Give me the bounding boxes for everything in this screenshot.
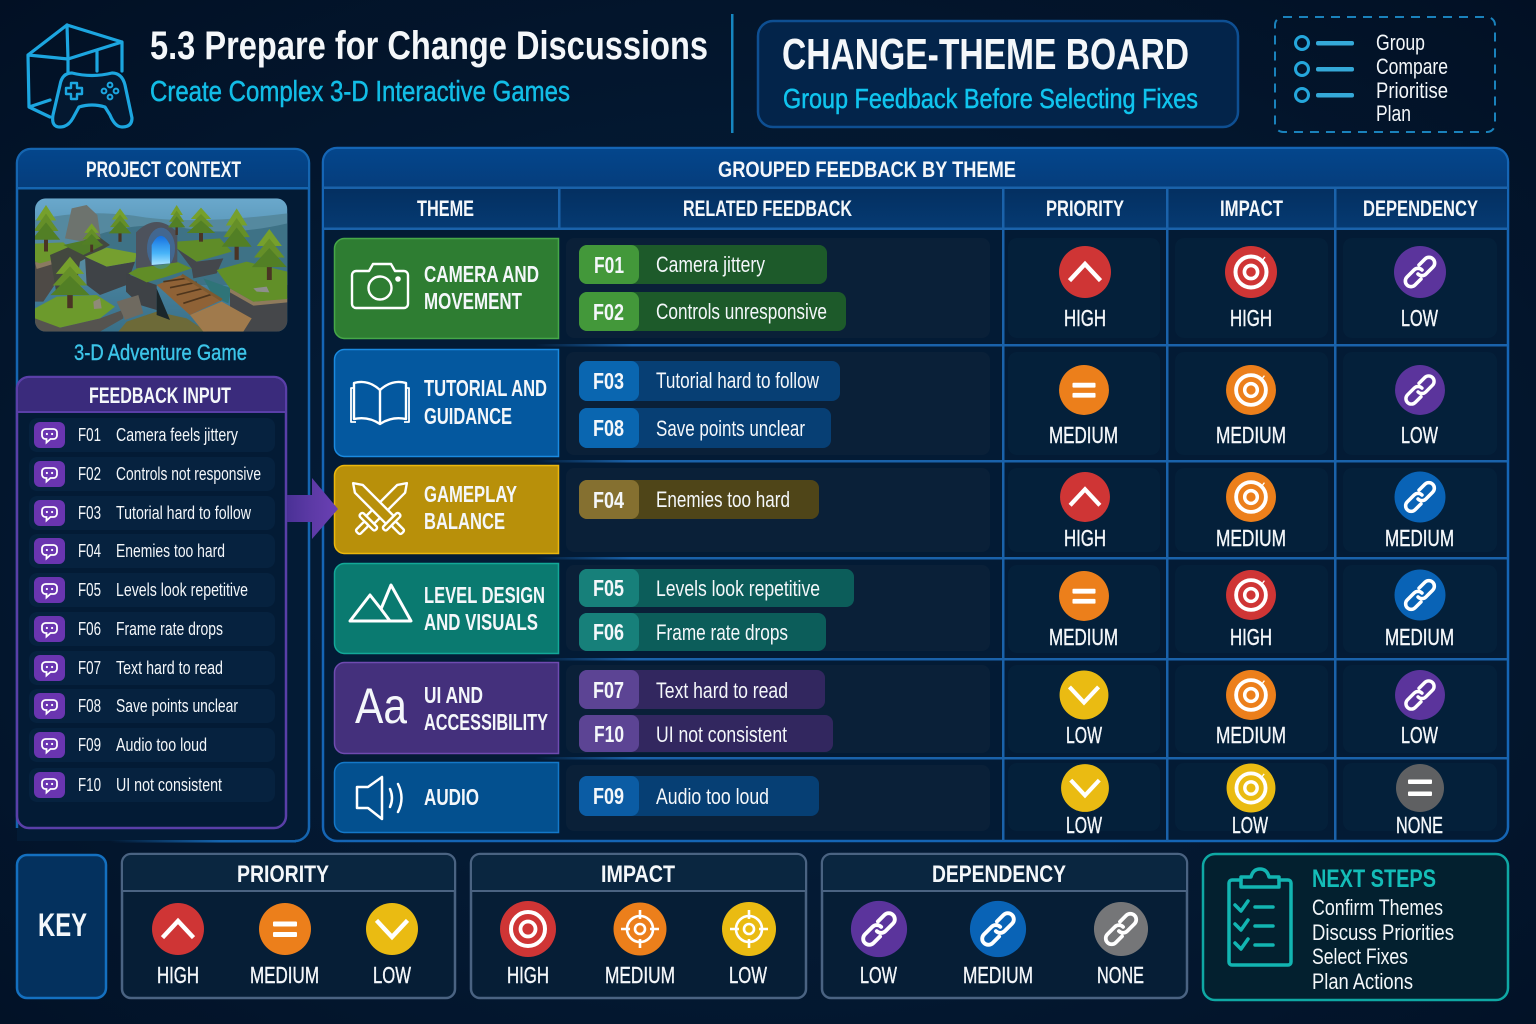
arrow: feedback input to themes [287,478,338,539]
rating: audio dependency none: NONE [1396,812,1443,838]
feedback pill F06 [579,613,826,651]
theme card: level design and visuals: AND VISUALS [424,609,538,635]
feedback pill F04 [579,480,819,519]
panel: project context [17,149,309,842]
key: impact low: LOW [729,962,767,988]
subtitle: Create Complex 3-D Interactive Games [150,76,570,108]
feedback pill F07: Text hard to read [656,678,788,703]
feedback row F09 [29,728,275,762]
feedback pill F03 [579,361,840,401]
column headings [417,196,1478,221]
rating: level design dependency medium [1385,570,1454,650]
rating: audio priority low [1061,764,1109,838]
feedback pill F08 [579,408,831,448]
heading: grouped feedback: GROUPED FEEDBACK BY THEME [718,157,1016,182]
feedback row F08: F08 [78,696,101,716]
rating: tutorial priority medium [1049,365,1118,448]
feedback row F04: F04 [78,541,101,561]
rating: audio dependency none [1396,764,1444,838]
key: dependency low: LOW [860,962,897,988]
key label [17,855,106,998]
rating: UI dependency low: LOW [1401,722,1438,748]
theme card: gameplay balance: BALANCE [424,508,505,534]
panel: change-theme board banner [758,21,1238,127]
game scene illustration [32,198,287,332]
key panel: dependency: DEPENDENCY [932,861,1066,888]
rating: level design impact high: HIGH [1230,624,1272,650]
key: dependency medium: MEDIUM [963,962,1033,988]
theme card: audio: AUDIO [424,784,479,810]
theme card: gameplay balance: GAMEPLAY [424,481,517,507]
column headings: THEME [417,196,474,221]
game label: 3-D Adventure Game [74,340,247,365]
feedback row F01: Camera feels jittery [116,425,238,445]
feedback pill F04: Enemies too hard [656,487,790,512]
feedback row F02: Controls not responsive [116,464,261,484]
icon: mountains [350,585,411,621]
key panel: dependency [822,854,1187,998]
rating: tutorial impact medium: MEDIUM [1216,422,1286,448]
rating: audio priority low: LOW [1066,812,1102,838]
feedback pill F06: Frame rate drops [656,620,788,645]
feedback pill F09: F09 [593,783,624,809]
rating: tutorial priority medium: MEDIUM [1049,422,1118,448]
theme card: tutorial and guidance [334,350,558,456]
next steps list [1312,895,1454,994]
feedback row F06: F06 [78,619,101,639]
key: impact low [722,902,776,988]
feedback pill F09: Audio too loud [656,784,769,809]
key: impact medium [605,902,675,988]
rating: UI priority low: LOW [1066,722,1102,748]
feedback pill F05 [579,569,854,607]
feedback pill F08: Save points unclear [656,416,805,441]
next steps list: Discuss Priorities [1312,920,1454,945]
feedback pill F01: F01 [594,252,624,278]
rating: camera priority high [1059,246,1111,331]
feedback row F01 [29,418,275,452]
feedback pill F04: F04 [593,487,624,513]
panel: next steps [1203,854,1508,1000]
feedback pill F10: UI not consistent [656,722,787,747]
column headings: RELATED FEEDBACK [683,196,852,221]
step list: Prioritise [1376,78,1448,103]
rating: camera priority high: HIGH [1064,305,1106,331]
key: priority medium [250,903,319,988]
rating: gameplay impact medium: MEDIUM [1216,525,1286,551]
panel: grouped feedback by theme [323,148,1508,841]
heading: feedback input: FEEDBACK INPUT [89,383,231,408]
feedback row F03: Tutorial hard to follow [116,503,252,523]
feedback pill F10: F10 [594,721,624,747]
next steps list: Confirm Themes [1312,895,1443,920]
feedback row F06 [29,612,275,646]
rating: gameplay priority high [1060,472,1110,551]
rating: camera impact high [1225,246,1277,331]
feedback row F08 [29,689,275,723]
feedback pill F01: Camera jittery [656,252,765,277]
theme card: camera and movement: MOVEMENT [424,288,522,314]
feedback row F07: F07 [78,658,101,678]
rating: gameplay impact medium [1216,472,1286,551]
rating: level design priority medium: MEDIUM [1049,624,1118,650]
rating: UI priority low [1060,671,1108,748]
rating: audio impact low: LOW [1232,812,1268,838]
rating: tutorial dependency low [1395,365,1445,448]
column headings: PRIORITY [1046,196,1124,221]
rating: camera dependency low [1394,246,1446,331]
feedback row F04: Enemies too hard [116,541,225,561]
column headings: IMPACT [1220,196,1283,221]
feedback pill F05: F05 [593,575,624,601]
key: dependency none [1094,902,1148,988]
feedback pill F06: F06 [593,619,624,645]
column headings: DEPENDENCY [1363,196,1478,221]
theme card: UI and accessibility: UI AND [424,682,483,708]
feedback row F10: UI not consistent [116,775,222,795]
theme card: UI and accessibility [334,662,558,754]
feedback row F07 [29,651,275,685]
feedback row F04 [29,534,275,568]
rating: gameplay priority high: HIGH [1064,525,1106,551]
icon: 3-D cube with game controller [28,25,132,127]
feedback row F08: Save points unclear [116,696,238,716]
banner heading: CHANGE-THEME BOARD [782,30,1189,79]
rating: gameplay dependency medium: MEDIUM [1385,525,1454,551]
panel: feedback input [17,377,286,828]
key panel: impact: IMPACT [601,861,675,888]
title: 5.3 Prepare for Change Discussions [150,24,708,68]
theme card: tutorial and guidance: GUIDANCE [424,403,512,429]
key panel: priority: PRIORITY [237,861,329,888]
icon: Aa type: Aa [355,678,407,734]
key: dependency none: NONE [1097,962,1144,988]
key: dependency medium [963,901,1033,988]
theme card: level design and visuals [334,564,558,654]
key: impact high: HIGH [507,962,549,988]
step list [1376,30,1448,126]
theme card: UI and accessibility: ACCESSIBILITY [424,709,548,735]
theme card: camera and movement: CAMERA AND [424,261,539,287]
feedback row F10: F10 [78,775,101,795]
rating: level design priority medium [1049,571,1118,650]
rating: tutorial impact medium [1216,365,1286,448]
icon: open book [351,382,409,424]
icon: camera [352,264,408,308]
theme card: camera and movement [334,238,558,338]
feedback pill F10 [579,715,833,752]
key panel: priority [122,854,455,998]
feedback row F03: F03 [78,503,101,523]
feedback row F02: F02 [78,464,101,484]
feedback pill F02 [579,292,846,331]
key: dependency low [851,901,907,988]
rating: tutorial dependency low: LOW [1401,422,1438,448]
feedback row F09: F09 [78,735,101,755]
feedback pill F05: Levels look repetitive [656,576,820,601]
step list: Compare [1376,54,1448,79]
step list: Plan [1376,101,1411,126]
key: priority low [366,903,418,988]
key: priority low: LOW [373,962,411,988]
icon: crossed swords [345,475,415,540]
feedback row F02 [29,457,275,491]
icon: clipboard checklist [1229,869,1291,965]
key panel: impact [471,854,806,998]
rating: UI impact medium [1216,670,1286,748]
rating: gameplay dependency medium [1385,472,1454,551]
feedback pill F07 [579,670,825,709]
key: priority high [152,903,204,988]
theme card: gameplay balance [334,466,558,554]
key: priority medium: MEDIUM [250,962,319,988]
heading: project context: PROJECT CONTEXT [86,157,241,182]
rating: UI impact medium: MEDIUM [1216,722,1286,748]
rating: camera impact high: HIGH [1230,305,1272,331]
feedback row F05: F05 [78,580,101,600]
feedback pill F01 [579,245,827,284]
key: impact medium: MEDIUM [605,962,675,988]
feedback row F09: Audio too loud [116,735,207,755]
feedback row F05 [29,573,275,607]
theme card: audio [334,762,558,832]
rating: UI dependency low [1395,670,1445,748]
feedback row F10 [29,768,275,802]
feedback row F01: F01 [78,425,101,445]
feedback pill F03: F03 [593,368,624,394]
feedback pill F03: Tutorial hard to follow [656,368,819,393]
banner subheading: Group Feedback Before Selecting Fixes [783,83,1198,114]
rating: level design dependency medium: MEDIUM [1385,624,1454,650]
panel: process steps [1275,17,1495,132]
theme card: level design and visuals: LEVEL DESIGN [424,582,545,608]
feedback row F07: Text hard to read [116,658,223,678]
rating: audio impact low [1227,764,1275,838]
feedback row F05: Levels look repetitive [116,580,248,600]
rating: level design impact high [1226,570,1276,650]
key label: KEY [38,907,87,943]
feedback pill F09 [579,776,819,816]
feedback pill F02: Controls unresponsive [656,299,827,324]
key: priority high: HIGH [157,962,199,988]
panel: next steps: NEXT STEPS [1312,865,1436,893]
feedback row F03 [29,496,275,530]
key: impact high [500,901,556,988]
icon: speaker [357,777,402,819]
feedback pill F02: F02 [593,299,624,325]
theme card: tutorial and guidance: TUTORIAL AND [424,375,547,401]
next steps list: Plan Actions [1312,969,1413,994]
rating: camera dependency low: LOW [1401,305,1438,331]
feedback row F06: Frame rate drops [116,619,223,639]
feedback pill F08: F08 [593,415,624,441]
next steps list: Select Fixes [1312,944,1408,969]
feedback pill F07: F07 [593,677,624,703]
step list: Group [1376,30,1425,55]
